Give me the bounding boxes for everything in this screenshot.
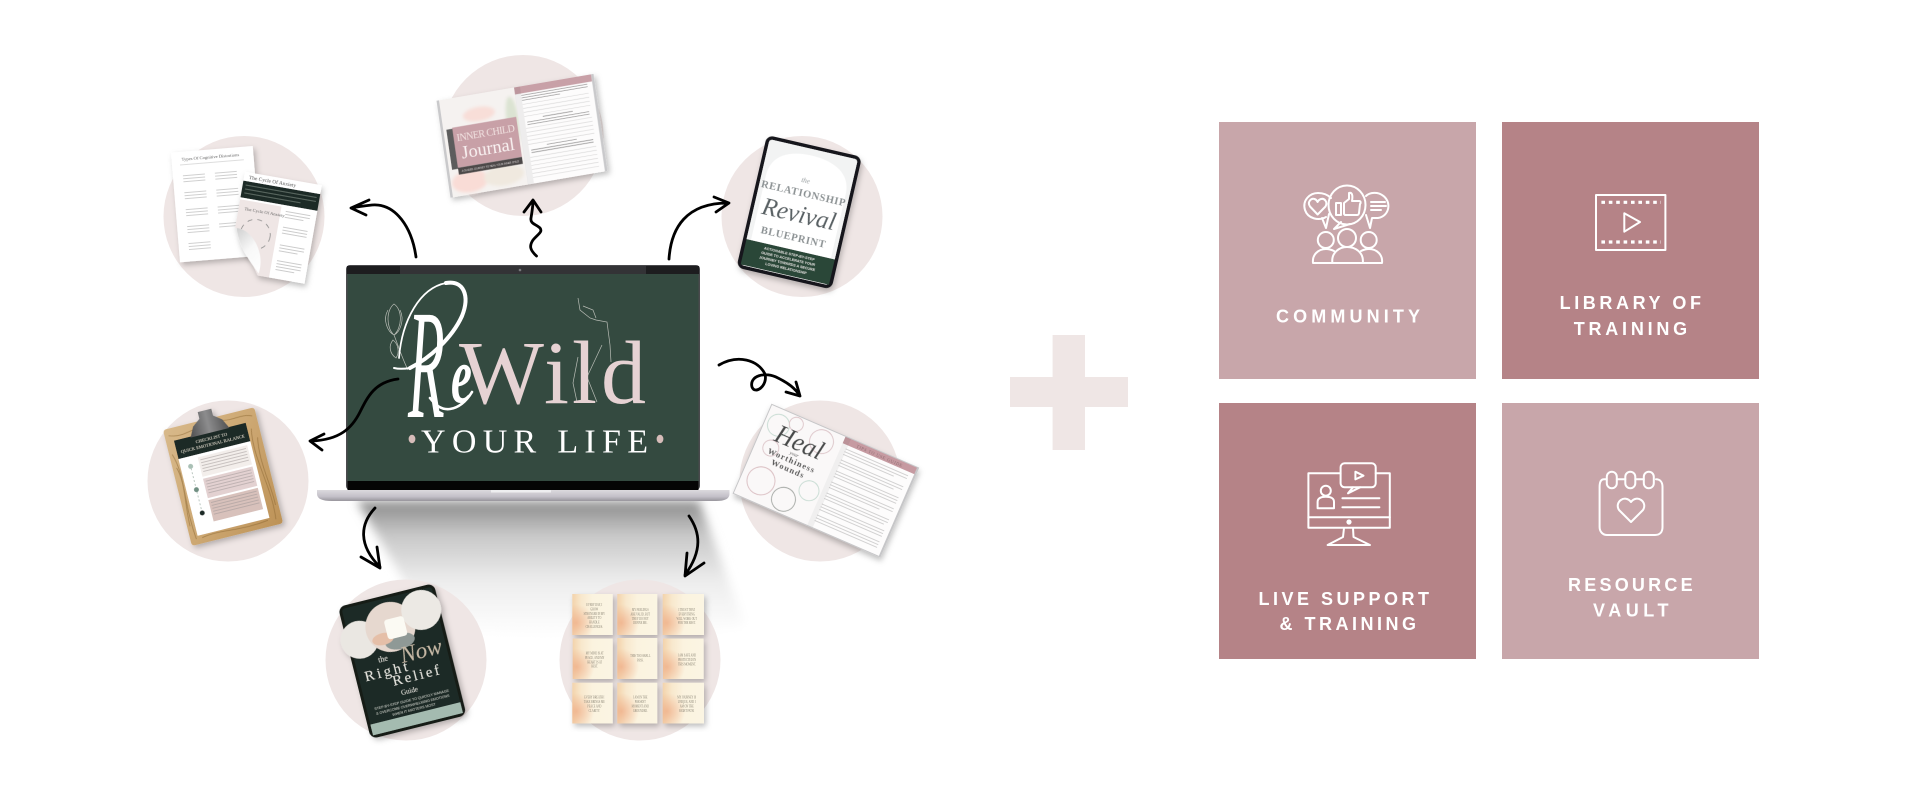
journal cover page: Journal <box>460 134 516 163</box>
label: library of: LIBRARY OF <box>1560 293 1701 313</box>
laptop top bezel <box>347 266 699 274</box>
product: relationship revival blueprint tablet: LOVING RELATIONSHIP <box>765 262 808 276</box>
card 2: MY FEELINGS <box>632 607 649 612</box>
laptop top bezel highlight <box>400 266 646 274</box>
laptop base <box>317 490 730 501</box>
label: community: COMMUNITY <box>1276 307 1420 327</box>
card 9: AM ON THE <box>680 704 694 709</box>
card 3: WILL WORK OUT <box>676 616 697 621</box>
panel: resource vault <box>1502 403 1759 659</box>
worksheet cycle of anxiety page <box>228 172 322 284</box>
journal lined page <box>514 74 605 185</box>
arrow: to relief guide <box>361 508 380 568</box>
text page: TIPS TO USE GUIDE <box>856 444 904 468</box>
logo script Re <box>407 278 472 451</box>
product: right now relief guide tablet <box>332 583 468 740</box>
card 1: STRONGER IN MY <box>584 611 605 616</box>
card 1: EVERY DAY, I <box>586 602 603 608</box>
product: right now relief guide tablet: WHEN IT MATTERS MOST <box>392 702 437 717</box>
page curl <box>230 228 266 274</box>
card 1: ABILITY TO <box>587 616 602 620</box>
laptop <box>317 265 730 501</box>
product: relationship revival blueprint tablet: GUIDE TO ACCELERATE YOUR <box>761 251 816 267</box>
card 5: PASS. <box>637 658 644 663</box>
floral cover page: Worthiness <box>766 446 817 475</box>
label: training: TRAINING <box>1574 319 1687 339</box>
arrow: to worthiness book <box>719 359 800 396</box>
product: clipboard checklist: QUICK EMOTIONAL BALANCE <box>180 433 245 454</box>
product: relationship revival blueprint tablet: Revival <box>758 193 838 236</box>
laptop lid <box>346 265 700 490</box>
product: relationship revival blueprint tablet: JOURNEY TOWARDS A SECURE <box>759 255 816 272</box>
product: relationship revival blueprint tablet: BLUEPRINT <box>760 225 826 251</box>
card 4 <box>573 638 613 679</box>
panel: library of training <box>1502 122 1759 379</box>
logo script Re: R <box>407 278 445 451</box>
panel: community <box>1219 122 1476 379</box>
card 6 <box>663 638 704 679</box>
woman line art <box>573 298 611 402</box>
text page <box>807 437 917 556</box>
card 1: HANDLE <box>589 620 600 625</box>
product: worksheets <box>171 146 322 284</box>
worksheet back page: Types Of Cognitive Distortions <box>181 152 240 162</box>
label: and training: & TRAINING <box>1280 614 1416 634</box>
card 1: CHALLENGES. <box>586 624 603 629</box>
product: heal worthiness wounds book <box>733 404 919 558</box>
logo letter flourish <box>394 283 472 409</box>
card 8 <box>617 683 657 724</box>
floral cover page <box>734 405 845 525</box>
arrow: to clipboard <box>310 379 398 450</box>
flower line art <box>386 304 408 370</box>
laptop lower bezel <box>348 481 698 490</box>
laptop notch <box>491 490 551 492</box>
product: right now relief guide tablet: the <box>377 654 389 665</box>
logo script Re: e <box>451 333 472 420</box>
card 3: EVERYTHING <box>679 612 695 617</box>
card 5: THIS TOO SHALL <box>630 653 650 658</box>
arrow: to journal <box>524 200 541 256</box>
card 6: I AM SAFE AND <box>678 653 696 658</box>
arrow: to worksheets <box>351 200 416 257</box>
product: right now relief guide tablet: & OVERCOME OVERWHELMING EMOTIONS <box>376 694 451 716</box>
card 3: I TRUST THAT <box>678 607 696 612</box>
product: right now relief guide tablet: Now <box>397 633 445 668</box>
journal cover page <box>439 88 528 197</box>
card 3: FOR THE BEST. <box>678 621 696 625</box>
laptop screen <box>348 274 698 481</box>
product: clipboard checklist <box>161 399 283 546</box>
card 6: THIS MOMENT. <box>678 662 696 667</box>
floral cover page: Wounds <box>770 457 806 480</box>
journal cover page: INNER CHILD <box>456 123 516 144</box>
arrow: to blueprint tablet <box>669 197 729 259</box>
card 9: UNIQUE, AND I <box>678 699 696 706</box>
card 2: DEFINE ME. <box>633 621 647 625</box>
card 4: MY MIND IS AT <box>586 651 604 656</box>
circle: relief guide backdrop <box>326 580 486 740</box>
card 7 <box>572 683 613 724</box>
journal cover page: A GUIDED JOURNEY TO HEAL YOUR INNER CHILD <box>462 160 520 173</box>
product: right now relief guide tablet: Right <box>363 659 410 685</box>
product: clipboard checklist: CHECKLIST TO <box>195 432 228 444</box>
icon: calendar heart <box>1600 472 1662 535</box>
circle: relationship blueprint backdrop <box>722 136 882 297</box>
icon: monitor with video call <box>1308 463 1390 545</box>
label: resource: RESOURCE <box>1568 575 1693 595</box>
circle: inner child journal backdrop <box>442 55 604 216</box>
worksheet cycle of anxiety page: The Cycle Of Anxiety <box>248 174 297 189</box>
product: inner child journal <box>436 74 607 198</box>
product: right now relief guide tablet: STEP-BY-STEP GUIDE TO QUICKLY MANAGE <box>374 689 450 711</box>
card 9: RIGHT PATH. <box>679 708 694 713</box>
card 4: HEART IS AT <box>587 660 603 665</box>
product: right now relief guide tablet: Guide <box>400 685 419 697</box>
circle: affirmation cards backdrop <box>560 580 720 740</box>
circle: worksheets backdrop <box>164 136 324 297</box>
logo: rewild your life <box>386 278 663 461</box>
card 2: THEY DO NOT <box>632 616 649 621</box>
product: relationship revival blueprint tablet: the <box>801 176 811 186</box>
logo dot right <box>657 435 663 443</box>
card 6: PROTECTED IN <box>678 657 696 662</box>
logo dot left <box>409 435 415 443</box>
card 8: PRESENT <box>635 699 646 704</box>
panel: live support and training <box>1219 403 1476 659</box>
card 1: GROW <box>590 607 599 612</box>
icon: film play <box>1596 195 1665 250</box>
laptop shadow <box>357 501 745 638</box>
card 3 <box>663 594 704 635</box>
worksheet back page <box>171 146 262 262</box>
product: right now relief guide tablet: Relief <box>391 663 441 690</box>
floral cover page: your <box>788 451 799 459</box>
card 8: I AM IN THE <box>633 695 647 700</box>
laptop camera <box>519 269 521 271</box>
card 7: EVERY BREATH I <box>584 695 605 700</box>
clipboard clip <box>185 406 229 438</box>
card 7: TAKE BRINGS ME <box>584 699 605 704</box>
logo word Wild: Wild <box>459 324 646 423</box>
icon: community <box>1304 186 1388 263</box>
arrow: to affirmation cards <box>685 516 704 576</box>
logo your life: YOUR LIFE <box>421 424 648 461</box>
worksheet cycle of anxiety page: The Cycle Of Anxiety <box>244 206 286 218</box>
card 8: MOMENT AND <box>632 704 649 709</box>
card 5 <box>617 638 657 679</box>
card 1 <box>572 594 613 635</box>
card 2: ARE VALID, BUT <box>631 612 651 618</box>
card 4: REST. <box>591 664 598 669</box>
circle: worthiness book backdrop <box>740 400 900 562</box>
card 9: MY JOURNEY IS <box>677 695 696 700</box>
product: relationship revival blueprint tablet: ACTIONABLE STEP-BY-STEP <box>764 246 816 262</box>
label: live support: LIVE SUPPORT <box>1258 589 1429 609</box>
card 9 <box>663 683 704 724</box>
card 7: PEACE AND <box>587 704 602 709</box>
card 4: PEACE, AND MY <box>585 655 605 661</box>
floral cover page: Heal <box>770 419 828 466</box>
card 2 <box>617 594 657 635</box>
circle: clipboard backdrop <box>148 400 308 562</box>
product: affirmation cards <box>572 594 704 724</box>
product: relationship revival blueprint tablet: RELATIONSHIP <box>760 179 847 209</box>
product: relationship revival blueprint tablet <box>736 135 862 289</box>
plus sign <box>1010 335 1128 450</box>
card 8: GROUNDED. <box>633 708 648 713</box>
card 7: CLARITY. <box>589 708 600 713</box>
label: vault: VAULT <box>1593 601 1668 621</box>
